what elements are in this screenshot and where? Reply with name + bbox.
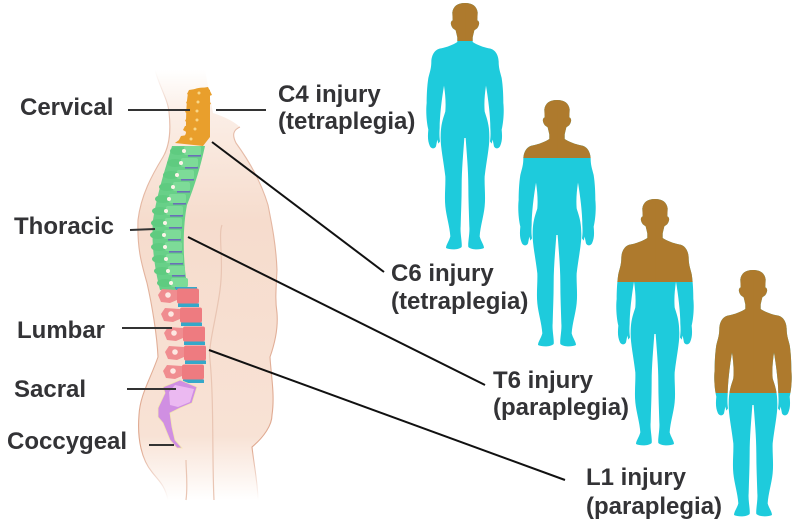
torso silhouette (138, 70, 277, 500)
figure: L1 injury body map (714, 270, 792, 516)
label: Coccygeal: Coccygeal (7, 428, 127, 455)
illustration: side view of torso with spine (138, 70, 277, 500)
leader and label: L1 injury (209, 350, 722, 520)
leader and label: C4 injury (216, 81, 415, 135)
leader and label: C4 injury: (tetraplegia) (278, 108, 415, 135)
label: Cervical: Cervical (20, 94, 113, 121)
figure: C4 injury body map (426, 3, 504, 249)
leader and label: L1 injury: L1 injury (586, 464, 687, 491)
thoracic vertebrae (150, 146, 205, 290)
leader and label: T6 injury: T6 injury (493, 367, 594, 394)
label: Lumbar: Lumbar (17, 317, 105, 344)
leader and label: T6 injury (188, 237, 629, 421)
figure: C6 injury body map (518, 100, 596, 346)
figure: T6 injury body map (616, 199, 694, 445)
leader and label: C6 injury: (tetraplegia) (391, 288, 528, 315)
label: Thoracic: Thoracic (14, 213, 114, 240)
leader and label: C4 injury: C4 injury (278, 81, 381, 108)
label: Sacral: Sacral (14, 376, 86, 403)
leader and label: L1 injury: (paraplegia) (586, 493, 722, 520)
leader and label: C6 injury (212, 142, 528, 315)
lumbar vertebrae (158, 287, 206, 383)
leader and label: T6 injury: (paraplegia) (493, 394, 629, 421)
sacrum and coccyx (158, 380, 197, 448)
cervical vertebrae (175, 87, 212, 146)
leader and label: C6 injury: C6 injury (391, 260, 494, 287)
